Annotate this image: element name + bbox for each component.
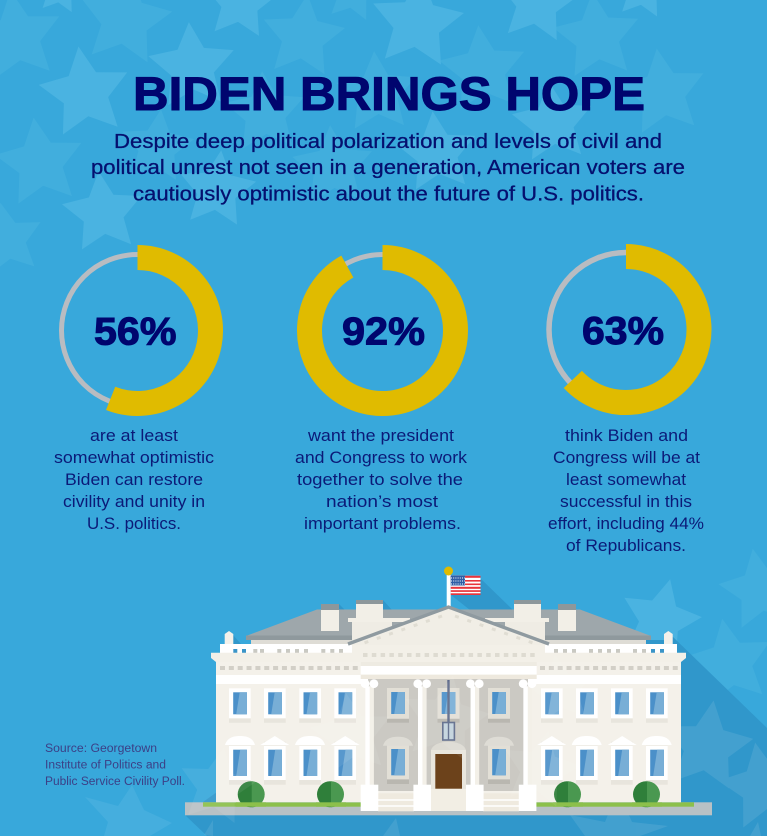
shrubs — [236, 781, 662, 807]
donut chart: 63% — [549, 252, 703, 406]
stat text: 63% — [548, 426, 704, 555]
source note: Public Service Civility Poll. — [45, 776, 185, 788]
stat text: 56%: Biden can restore — [65, 470, 203, 489]
lawn — [203, 802, 694, 807]
background stars: top — [0, 0, 710, 277]
title: BIDEN BRINGS HOPE — [133, 68, 645, 121]
roof — [233, 600, 651, 644]
pediment — [348, 607, 549, 662]
donut chart: 56%: 56% — [94, 310, 176, 353]
stat text: 92%: and Congress to work — [295, 448, 468, 467]
wing windows — [225, 688, 672, 785]
columns — [361, 679, 378, 811]
stat text: 63%: think Biden and — [565, 426, 688, 445]
balustrade — [220, 644, 677, 653]
steps — [378, 789, 519, 811]
translucent stars over building — [174, 650, 598, 825]
source note: Source: Georgetown — [45, 743, 157, 755]
lantern — [443, 680, 454, 740]
donut chart: 92% — [306, 254, 458, 406]
stat text: 56%: somewhat optimistic — [54, 448, 215, 467]
chimneys — [321, 600, 576, 644]
donut chart: 63%: 63% — [582, 310, 664, 353]
donut chart: 92%: 92% — [342, 310, 425, 353]
wings — [211, 653, 686, 802]
stat text: 92% — [295, 426, 468, 533]
stat text: 63%: least somewhat — [566, 470, 686, 489]
building cast shadow — [185, 578, 767, 836]
background stars: lower right — [85, 542, 767, 836]
portico windows — [387, 688, 409, 723]
door — [431, 742, 466, 791]
stat text: 92%: important problems. — [304, 514, 461, 533]
intro text: political unrest not seen in a generation, American voters are — [91, 156, 685, 179]
intro text: cautiously optimistic about the future of U.S. politics. — [133, 182, 644, 206]
donut chart: 56% — [62, 254, 214, 406]
stat text: 63%: effort, including 44% — [548, 514, 704, 533]
stat text: 63%: successful in this — [560, 492, 692, 511]
stat text: 92%: together to solve the — [297, 470, 463, 489]
stat text: 56%: civility and unity in — [63, 492, 205, 511]
stat text: 63%: Congress will be at — [553, 448, 700, 467]
ground slab — [185, 802, 712, 815]
stat text: 56% — [54, 426, 215, 533]
intro text: Despite deep political polarization and levels of civil and — [114, 130, 662, 153]
illustration: White House — [185, 566, 712, 815]
portico — [348, 607, 549, 811]
source note: Institute of Politics and — [45, 760, 166, 772]
shadow stars — [204, 694, 767, 836]
stat text: 63%: of Republicans. — [566, 536, 686, 555]
stat text: 92%: want the president — [307, 426, 454, 445]
source note — [45, 743, 185, 788]
stat text: 56%: are at least — [90, 426, 178, 445]
intro text — [91, 130, 685, 206]
flag — [444, 566, 480, 606]
pinnacles — [225, 631, 673, 644]
stat text: 56%: U.S. politics. — [87, 514, 181, 533]
stat text: 92%: nation’s most — [326, 492, 438, 511]
